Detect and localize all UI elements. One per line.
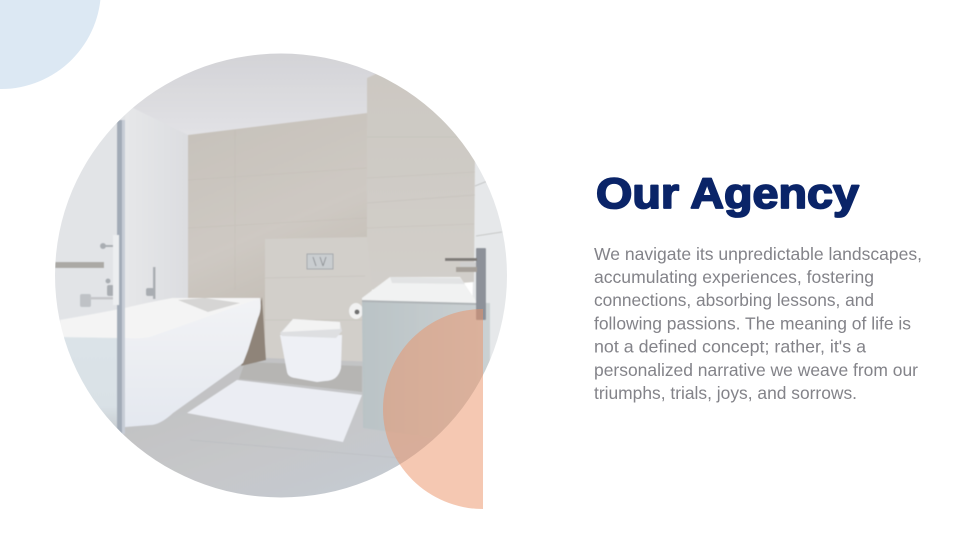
toilet: [280, 319, 342, 382]
body paragraph: following passions. The meaning of life is: [594, 314, 911, 334]
decorative blue corner circle: [0, 0, 101, 89]
left white wall: [125, 104, 188, 320]
toilet paper: [349, 303, 363, 319]
shower back wall: [55, 168, 117, 322]
body paragraph: personalized narrative we weave from our: [594, 360, 918, 380]
white wall on right: [472, 168, 507, 360]
faucet: [445, 248, 486, 320]
low partition: [265, 237, 372, 368]
body paragraph: [594, 244, 922, 403]
title: Our Agency: [596, 170, 859, 218]
body paragraph: connections, absorbing lessons, and: [594, 290, 874, 310]
peach semicircle overlay: [383, 309, 483, 509]
towel bar: [55, 262, 104, 268]
floor shadow near wall: [239, 362, 362, 392]
bathtub: [60, 298, 261, 427]
sink basin: [362, 277, 476, 304]
shower glass edge: [113, 120, 125, 434]
shower valves: [80, 243, 156, 307]
shadow behind tub: [241, 297, 266, 366]
back wall tile: [188, 113, 367, 365]
body paragraph: We navigate its unpredictable landscapes,: [594, 244, 922, 264]
body paragraph: accumulating experiences, fostering: [594, 267, 874, 287]
vanity cabinet: [362, 300, 490, 438]
bath mat: [187, 380, 362, 442]
body paragraph: triumphs, trials, joys, and sorrows.: [594, 383, 857, 403]
circular bathroom photo: [50, 48, 520, 520]
ceiling: [124, 54, 376, 136]
floor: [122, 358, 436, 498]
tile pillar: [367, 72, 475, 290]
body paragraph: not a defined concept; rather, it's a: [594, 336, 866, 356]
glass area left of panel: [64, 336, 118, 428]
flush plate: [307, 254, 333, 269]
